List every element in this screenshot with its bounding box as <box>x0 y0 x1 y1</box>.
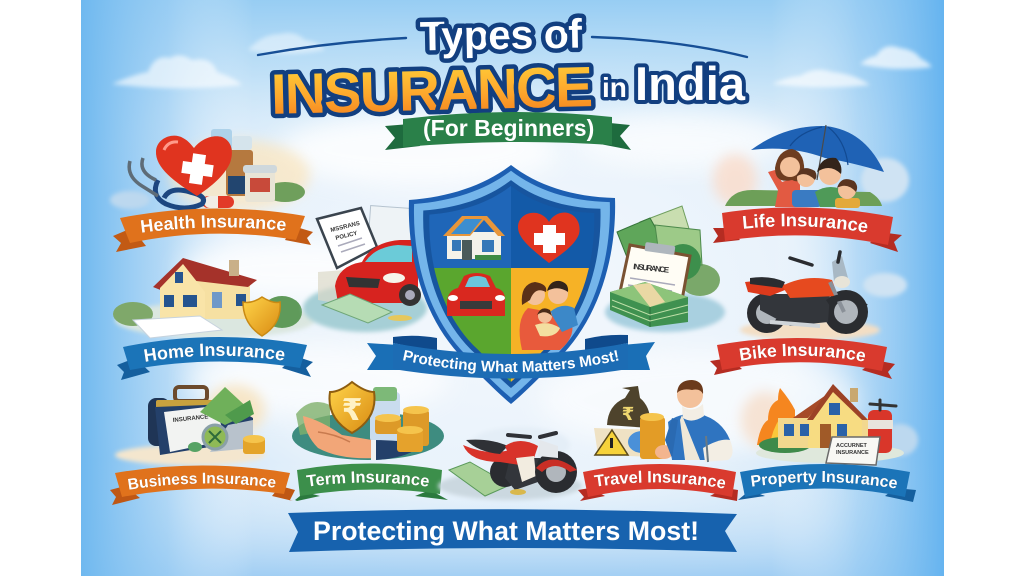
shield icon: family <box>520 281 578 350</box>
title: Types of Insurance in India: INSURANCE <box>270 55 594 127</box>
ribbon: Bike Insurance <box>710 338 895 379</box>
shield quadrants <box>429 186 594 382</box>
ribbon: Health Insurance <box>113 208 313 252</box>
shield icon: heart <box>518 213 580 263</box>
subtitle ribbon: For Beginners: (For Beginners) <box>423 115 594 141</box>
illustration: money and policy clipboard: INSURANCE <box>633 262 670 275</box>
ribbon: Travel Insurance: Travel Insurance <box>594 470 726 489</box>
title: Types of Insurance in India <box>270 11 746 127</box>
illustration: term: ₹ <box>342 393 362 428</box>
ribbon: Term Insurance <box>295 464 448 501</box>
illustration: health <box>110 129 310 210</box>
ribbon: Life Insurance: Life Insurance <box>742 213 868 232</box>
illustration: home <box>113 258 315 338</box>
illustration: car and policy documents <box>303 206 427 332</box>
ribbon: Protecting What Matters Most (shield) <box>367 334 655 378</box>
title: Types of Insurance in India: in <box>602 72 627 103</box>
illustration: property with fire: ACCURNET <box>836 443 868 449</box>
central shield <box>409 165 615 408</box>
illustration: money and policy clipboard <box>605 206 725 332</box>
ribbon: Business Insurance <box>110 466 295 505</box>
shield icon: car <box>447 273 505 316</box>
bottom banner <box>288 509 737 552</box>
ribbon: Property Insurance: Property Insurance <box>750 470 897 488</box>
illustration: term <box>292 382 444 460</box>
ribbon: Life Insurance <box>713 207 902 252</box>
illustration: motorbike and cash <box>438 427 582 500</box>
title: Types of Insurance in India: Types of <box>420 11 583 59</box>
illustration: car and policy documents: MSSRANS <box>330 221 361 234</box>
ribbon: Protecting What Matters Most (shield): Protecting What Matters Most! <box>403 350 618 374</box>
illustration: business <box>115 385 265 465</box>
ribbon: Health Insurance: Health Insurance <box>140 215 286 233</box>
ribbon: Business Insurance: Business Insurance <box>128 472 276 490</box>
illustration: property with fire <box>741 384 918 465</box>
clouds <box>112 33 932 88</box>
ribbon: Home Insurance <box>117 337 313 380</box>
illustration: motorbike <box>740 252 907 340</box>
bottom banner: Protecting What Matters Most! <box>313 516 699 546</box>
illustration: travel and injury <box>594 380 733 462</box>
illustration: family under umbrella <box>713 125 909 208</box>
illustration: travel and injury: ₹ <box>622 404 634 425</box>
illustration: business: INSURANCE <box>173 414 209 424</box>
ribbon: Bike Insurance: Bike Insurance <box>739 344 866 362</box>
illustration: car and policy documents: POLICY <box>335 231 358 242</box>
title swooshes <box>258 37 747 57</box>
ribbon: Travel Insurance <box>578 464 738 501</box>
ribbon: Home Insurance: Home Insurance <box>144 343 285 362</box>
shield icon: house <box>443 216 505 260</box>
subtitle ribbon: For Beginners <box>385 112 631 150</box>
ribbon: Term Insurance: Term Insurance <box>306 471 429 487</box>
illustration: property with fire: INSURANCE <box>836 450 869 456</box>
title: Types of Insurance in India: India <box>635 57 746 110</box>
ribbon: Property Insurance <box>738 464 916 502</box>
